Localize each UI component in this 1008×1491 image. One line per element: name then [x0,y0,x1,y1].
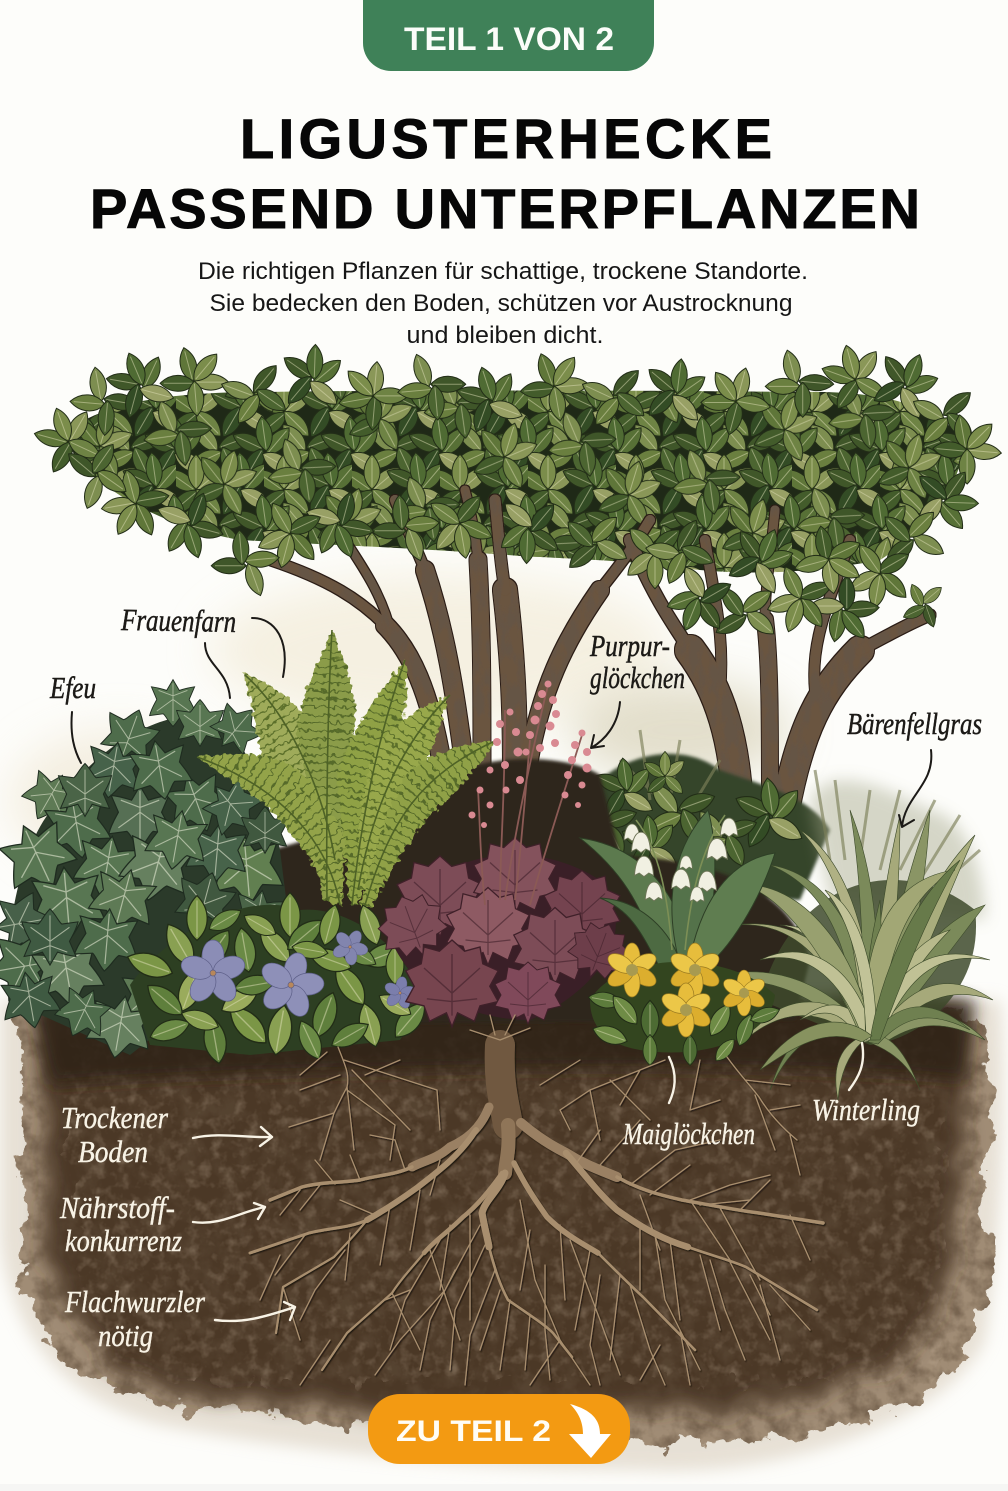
canopy edge foliage [25,332,1008,656]
labels: dark plant names: Purpur- [589,628,670,663]
labels: dark plant names: Frauenfarn [120,602,236,639]
button: to part 2 [368,1394,630,1464]
bottom strip [0,1484,1008,1491]
plant: bearskin grass (Bärenfellgras) [690,810,993,1100]
plant: lady fern (Frauenfarn) [197,630,497,908]
fern midribs [197,630,497,905]
intro text: Die richtigen Pflanzen für schattige, trockene Standorte. [198,258,808,285]
roots [250,1015,823,1385]
labels: white soil notes: konkurrenz [65,1223,182,1258]
button: to part 2: ZU TEIL 2 [396,1415,551,1448]
white arrows [193,1043,863,1321]
plant: periwinkle [124,893,432,1065]
soil cross-section [0,985,1003,1471]
labels: white soil notes: Flachwurzler [64,1284,206,1319]
background shrubs on the right [572,730,985,920]
dark ground shadow behind plants [270,759,810,1025]
labels: white soil notes: Trockener [61,1100,169,1135]
background wash behind plants [10,575,790,870]
labels: white soil notes: Winterling [812,1092,920,1127]
labels: white soil notes: Boden [78,1134,148,1169]
trees: hedge trunks and branches [270,490,930,810]
hedge canopy [62,390,966,573]
plant: lily of the valley (Maiglöckchen) [580,810,775,970]
labels: dark plant names: Efeu [49,670,96,705]
title [90,107,920,240]
labels: white soil notes: Nährstoff- [59,1190,175,1225]
labels: dark plant names: glöckchen [590,660,685,695]
plant: coral bells (Purpurglöckchen) [371,680,637,1027]
title: LIGUSTERHECKE [240,107,772,170]
intro text: und bleiben dicht. [406,322,604,349]
badge: part 1 of 2: TEIL 1 VON 2 [404,21,614,57]
labels: white soil notes: Maiglöckchen [622,1116,755,1151]
badge: part 1 of 2 [363,0,654,71]
intro text: Sie bedecken den Boden, schützen vor Austrocknung [210,290,792,317]
plant: ivy (Efeu) [0,680,290,1063]
labels: white soil notes: nötig [98,1318,153,1353]
icon: down arrow [569,1404,611,1458]
labels: white soil notes [59,1092,920,1353]
title: PASSEND UNTERPFLANZEN [90,177,920,240]
intro text [198,258,808,349]
labels: dark plant names [49,602,982,741]
plant: winter aconite (Winterling) [587,943,782,1065]
leader lines [71,618,931,827]
